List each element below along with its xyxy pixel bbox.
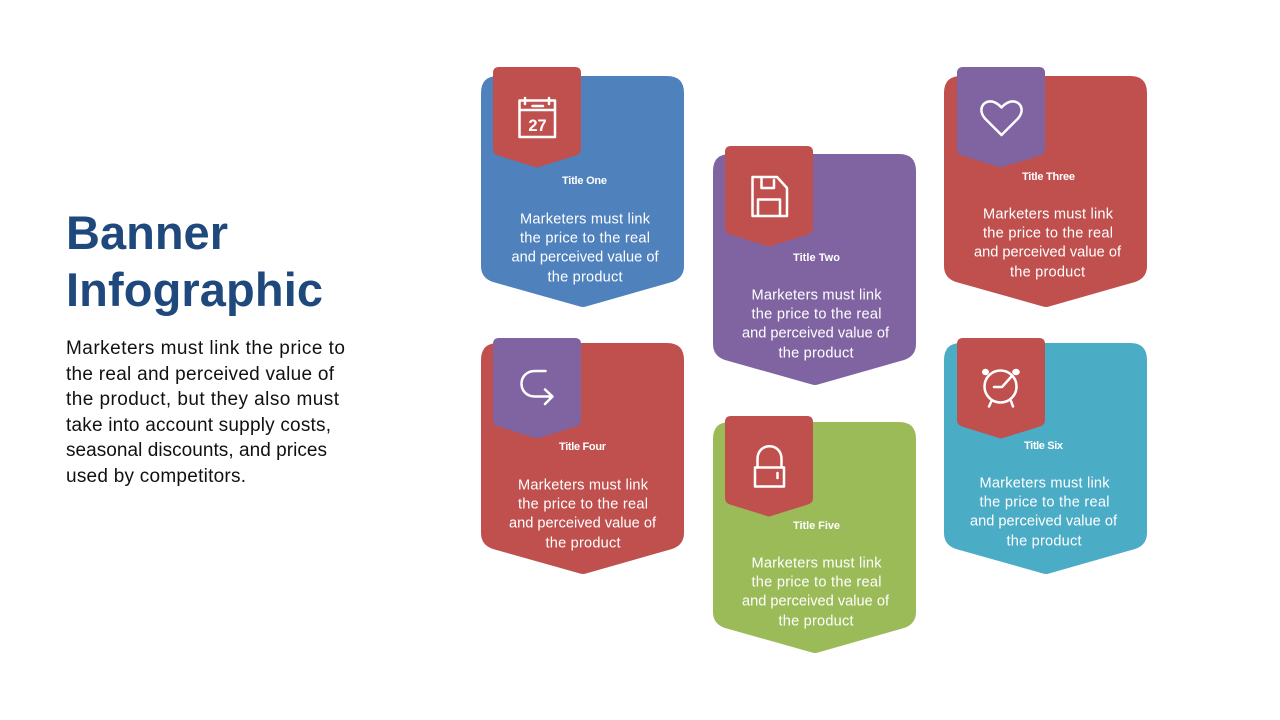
card body text: the product: [778, 614, 854, 630]
card shape: [944, 76, 1147, 307]
title: [66, 206, 323, 316]
panel: title two: [713, 146, 916, 385]
card body text: the product: [778, 346, 854, 362]
card body text: the price to the real: [752, 574, 882, 590]
intro text block: the real and perceived value of: [66, 364, 335, 385]
card body text: Marketers must link: [980, 476, 1110, 492]
intro text block: the product, but they also must: [66, 389, 340, 410]
card body text: Marketers must link: [518, 478, 649, 494]
card body text: and perceived value of: [742, 594, 890, 610]
card body text: the product: [548, 270, 622, 286]
card body text: the product: [1010, 264, 1085, 280]
intro text block: take into account supply costs,: [66, 415, 331, 436]
card body text: [970, 476, 1118, 550]
card heading: Title Six: [1024, 440, 1064, 452]
tab with alarm clock icon: [957, 338, 1045, 438]
card body text: Marketers must link: [752, 288, 882, 304]
card shape: [944, 343, 1147, 574]
panel: title three: [944, 67, 1147, 307]
tab with calendar icon: 27: [528, 117, 547, 135]
card shape: [481, 343, 684, 574]
tab with floppy disk icon: [725, 146, 813, 246]
tab with calendar icon: [493, 67, 581, 168]
card shape: [713, 154, 916, 385]
card body text: [742, 288, 890, 362]
tab with return arrow icon: [493, 338, 581, 438]
card body text: Marketers must link: [520, 212, 651, 228]
card body text: Marketers must link: [983, 206, 1114, 222]
card body text: and perceived value of: [970, 514, 1118, 530]
intro text block: seasonal discounts, and prices: [66, 440, 327, 461]
card heading: Title Four: [559, 441, 607, 453]
card body text: [974, 206, 1122, 280]
intro text block: Marketers must link the price to: [66, 338, 345, 359]
card shape: [713, 422, 916, 653]
title: Infographic: [66, 263, 323, 316]
card body text: the price to the real: [520, 230, 650, 246]
card body text: [512, 212, 659, 286]
card body text: and perceived value of: [974, 244, 1122, 260]
title: Banner: [66, 206, 228, 259]
card heading: Title Two: [793, 252, 840, 264]
card body text: and perceived value of: [509, 516, 657, 532]
card body text: the product: [1006, 534, 1082, 550]
card heading: Title Five: [793, 520, 840, 532]
card body text: the product: [546, 536, 620, 552]
panel: title four: [481, 338, 684, 574]
card shape: [481, 76, 684, 307]
card heading: Title One: [562, 175, 607, 187]
card heading: Title Three: [1022, 171, 1075, 183]
card body text: Marketers must link: [752, 556, 882, 572]
card body text: the price to the real: [980, 494, 1110, 510]
panel: title six: [944, 338, 1147, 574]
card body text: [742, 556, 890, 630]
card body text: the price to the real: [518, 496, 648, 512]
tab with heart icon: [957, 67, 1045, 168]
panel: title five: [713, 416, 916, 653]
card body text: [509, 478, 657, 552]
panel: title one: [481, 67, 684, 307]
card body text: and perceived value of: [512, 250, 659, 266]
intro text block: used by competitors.: [66, 466, 246, 487]
card body text: the price to the real: [983, 226, 1113, 242]
card body text: and perceived value of: [742, 326, 890, 342]
card body text: the price to the real: [752, 306, 882, 322]
tab with padlock icon: [725, 416, 813, 516]
intro text block: [66, 338, 345, 487]
